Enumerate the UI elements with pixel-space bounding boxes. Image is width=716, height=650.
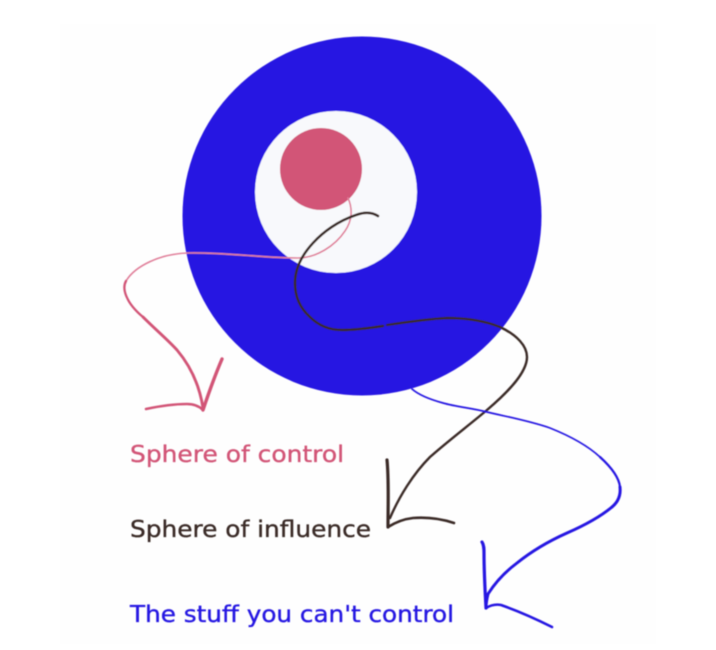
inner circle: sphere of control bbox=[280, 128, 362, 210]
middle circle: sphere of influence bbox=[255, 111, 417, 273]
arrow: pink from sphere of control bbox=[124, 198, 351, 410]
label: sphere of control: Sphere of control bbox=[130, 442, 344, 468]
diagram: nested spheres and arrows bbox=[124, 36, 620, 628]
arrow: blue from outer circle bbox=[412, 389, 620, 627]
outer circle: the stuff you can't control bbox=[182, 36, 542, 396]
label: sphere of influence: Sphere of influence bbox=[130, 517, 371, 543]
label: the stuff you can't control: The stuff you can't control bbox=[129, 602, 454, 628]
arrow: dark from sphere of influence bbox=[295, 213, 527, 527]
